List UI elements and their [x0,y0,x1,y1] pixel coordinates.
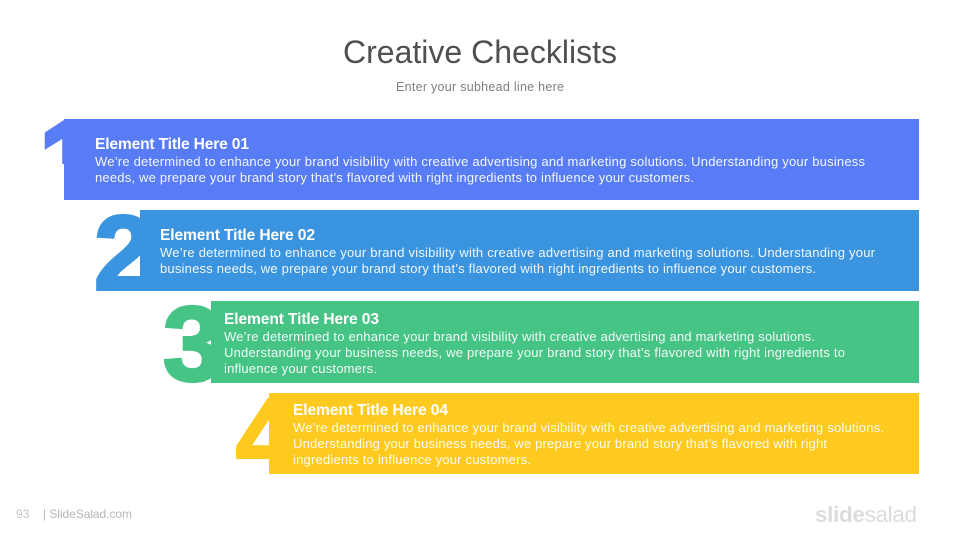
text block 01 [95,154,866,185]
text block 01: needs, we prepare your brand story that’s flavored with right ingredients to influence your customers. [95,170,694,185]
title: Creative Checklists [343,34,617,70]
numeral 3: 3 [163,286,222,404]
bar 3 [211,301,919,383]
logo: slidesalad: slidesalad [815,502,917,527]
footer source: | SlideSalad.com [43,507,132,521]
text block 04: Understanding your business needs, we prepare your brand story that’s flavored with right [293,436,827,451]
numeral 1: 1 [40,100,99,218]
page number: 93 [16,507,30,521]
text block 03 [224,329,845,376]
bar 4 [269,393,919,474]
text block 04: ingredients to influence your customers. [293,452,531,467]
text block 03: We’re determined to enhance your brand visibility with creative advertising and marketing solutions. [224,329,815,344]
panel: element 04 [236,393,919,474]
subhead: Enter your subhead line here [396,80,564,94]
panel: element 02 [96,210,919,291]
bar 1 [64,119,919,200]
heading 01: Element Title Here 01 [95,136,249,153]
text block 01: We’re determined to enhance your brand visibility with creative advertising and marketing solutions. Understanding your business [95,154,866,169]
heading 02: Element Title Here 02 [160,227,315,244]
text block 04: We’re determined to enhance your brand visibility with creative advertising and marketing solutions. [293,420,884,435]
heading 03: Element Title Here 03 [224,311,379,328]
text block 03: Understanding your business needs, we prepare your brand story that’s flavored with right ingredients to [224,345,845,360]
text block 02: business needs, we prepare your brand story that’s flavored with right ingredients to influence your customers. [160,261,816,276]
text block 04 [293,420,884,467]
panel: element 03 [164,301,919,383]
text block 03: influence your customers. [224,361,377,376]
bar 2 [140,210,919,291]
text block 02: We’re determined to enhance your brand visibility with creative advertising and marketing solutions. Understanding your [160,245,876,260]
panel: element 01 [44,119,919,200]
numeral 4: 4 [236,378,295,496]
text block 02 [160,245,876,276]
numeral 2: 2 [94,194,153,312]
heading 04: Element Title Here 04 [293,402,448,419]
